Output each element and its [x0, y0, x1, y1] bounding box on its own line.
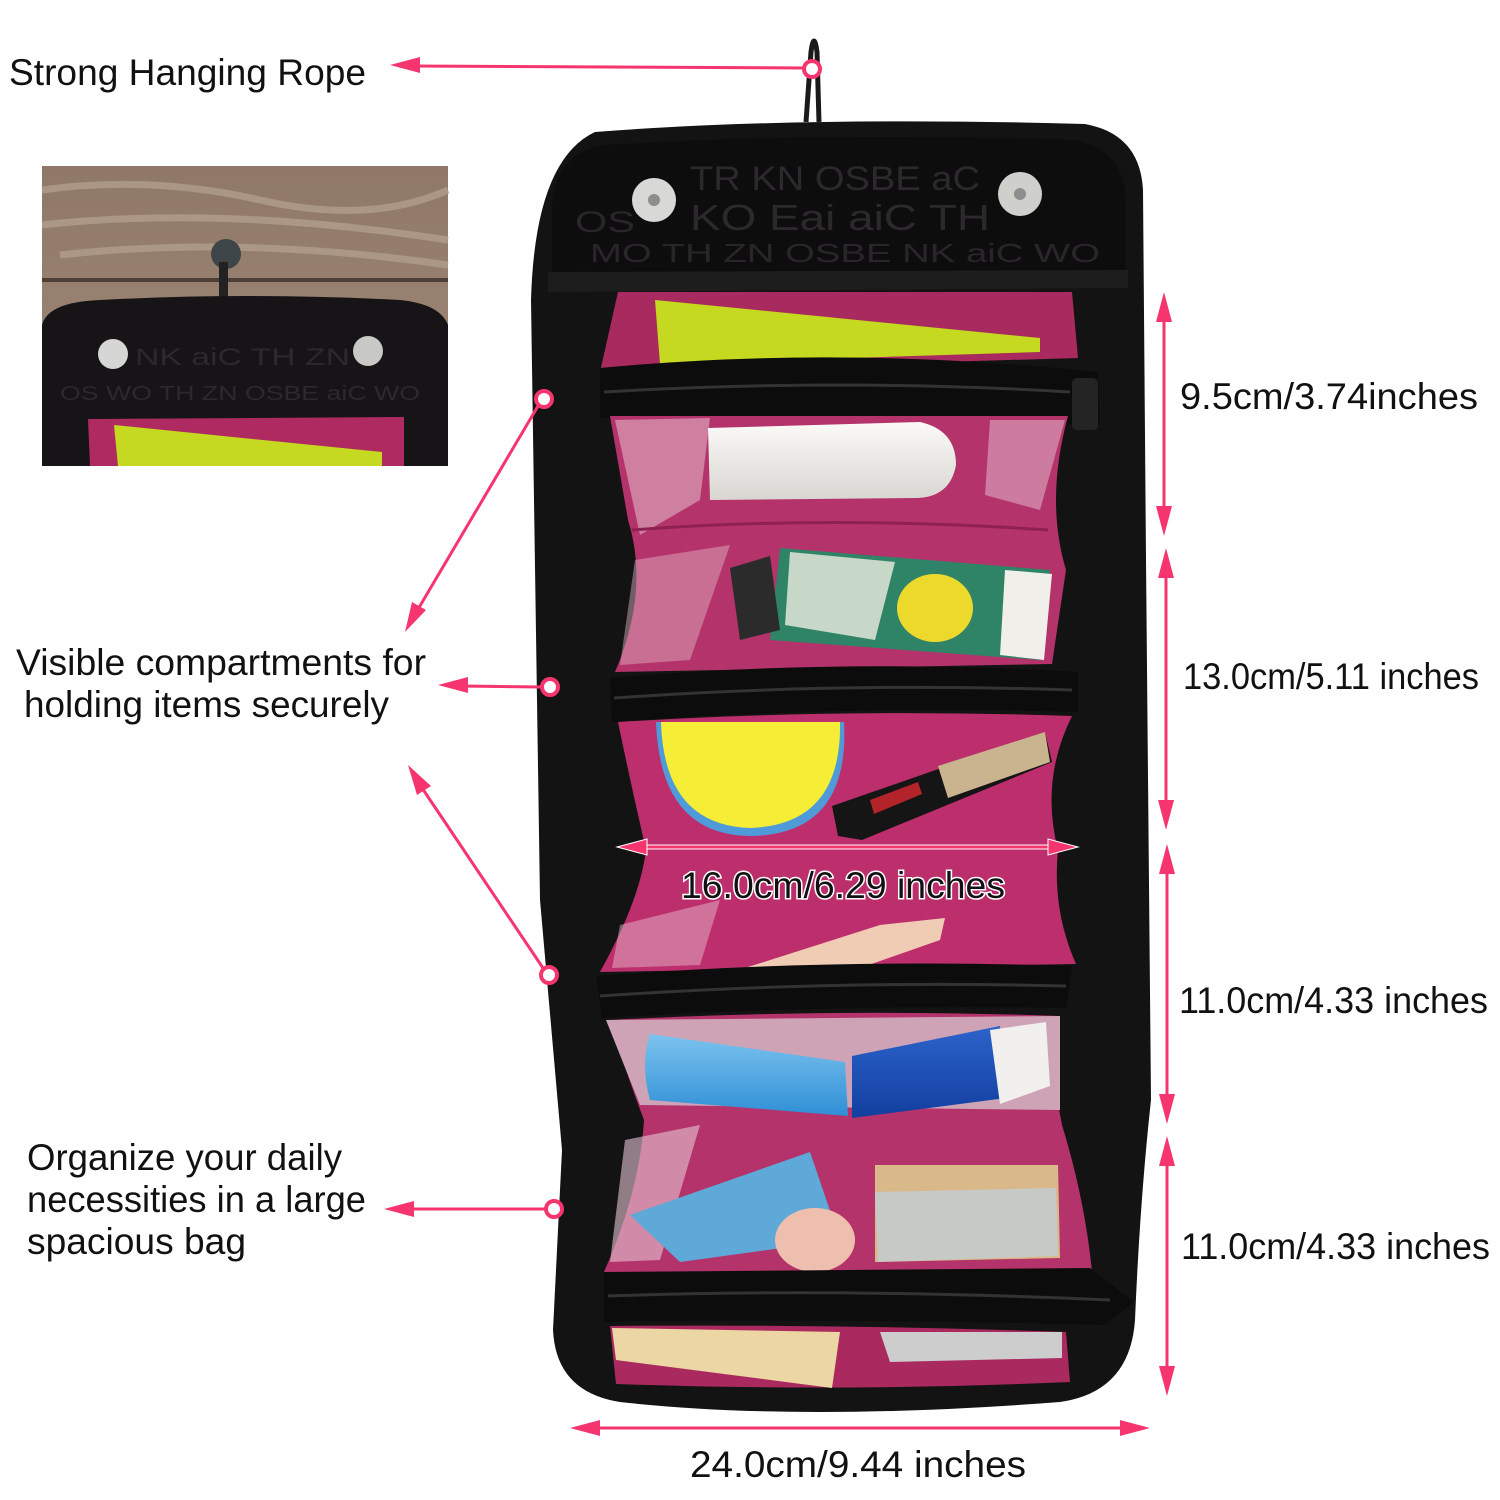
inset photo: hanging on hook: NK aiC TH ZN: [135, 344, 350, 371]
callout: organize daily necessities: spacious bag: [27, 1221, 246, 1262]
callout: strong hanging rope: Strong Hanging Rope: [9, 52, 366, 93]
white bottle: [708, 422, 956, 500]
flap pattern text: KO Eai aiC TH: [690, 197, 990, 238]
yellow compact: [656, 722, 844, 836]
inset photo: hanging on hook: [42, 166, 448, 466]
dimension: 13.0cm: 13.0cm/5.11 inches: [1183, 656, 1479, 697]
bag flap with letter pattern: [552, 137, 1126, 272]
blue bottle: [645, 1034, 848, 1116]
pocket 5: [610, 1326, 1070, 1388]
callout: organize daily necessities: necessities in a large: [27, 1179, 366, 1220]
dimension: 11.0cm upper: [1159, 844, 1488, 1124]
dimension: 11.0cm lower: 11.0cm/4.33 inches: [1181, 1226, 1490, 1267]
dimension: 11.0cm upper: 11.0cm/4.33 inches: [1179, 980, 1488, 1021]
dimension: 16.0cm inner width: 16.0cm/6.29 inches: [681, 865, 1005, 906]
pocket 4: [604, 1013, 1092, 1272]
dimension: 11.0cm lower: [1159, 1136, 1490, 1396]
bag body: [531, 121, 1151, 1412]
arrow up to top dot: [405, 391, 552, 632]
flap pattern text: MO TH ZN OSBE NK aiC WO: [590, 238, 1100, 268]
pocket 3: [600, 713, 1076, 972]
sachets: [630, 1152, 840, 1262]
flap seam: [548, 270, 1128, 292]
dimension: 9.5cm: [1156, 292, 1478, 536]
cosmetic tube: [745, 918, 945, 968]
arrow lower dot: [408, 765, 557, 983]
snap button left: [632, 178, 676, 222]
callout: visible compartments: holding items securely: [24, 684, 389, 725]
patterned tube: [770, 548, 1050, 660]
pocket 1: [600, 292, 1078, 372]
flap pattern text: TR KN OSBE aC: [690, 160, 980, 198]
pocket 2: [610, 416, 1068, 672]
zipper 2: [610, 666, 1078, 722]
hanging rope: [806, 41, 819, 122]
lipstick: [832, 732, 1052, 840]
flap pattern text: OS: [575, 206, 635, 239]
callout: organize daily necessities: Organize your daily: [27, 1137, 342, 1178]
dimension: 24.0cm outer width: 24.0cm/9.44 inches: [690, 1444, 1026, 1485]
snap button right: [998, 172, 1042, 216]
dimension: 13.0cm: [1158, 548, 1479, 830]
dimension: 16.0cm inner width: [617, 839, 1078, 906]
arrow middle dot: [438, 677, 558, 695]
flap pattern text: [575, 160, 1100, 268]
product: hanging bag: [531, 121, 1151, 1412]
callout: strong hanging rope: [9, 52, 820, 93]
dimension: 24.0cm outer width: [570, 1420, 1150, 1485]
callout: visible compartments: [16, 391, 558, 983]
dimension: 9.5cm: 9.5cm/3.74inches: [1180, 376, 1478, 417]
zipper 1: [600, 357, 1100, 430]
callout: organize daily necessities: [27, 1137, 562, 1262]
inset photo: hanging on hook: OS WO TH ZN OSBE aiC WO: [60, 383, 420, 405]
dark blue bottle: [852, 1026, 1006, 1118]
zipper 4: [604, 1268, 1134, 1325]
callout: visible compartments: Visible compartments for: [16, 642, 426, 683]
zipper 3: [596, 964, 1072, 1018]
